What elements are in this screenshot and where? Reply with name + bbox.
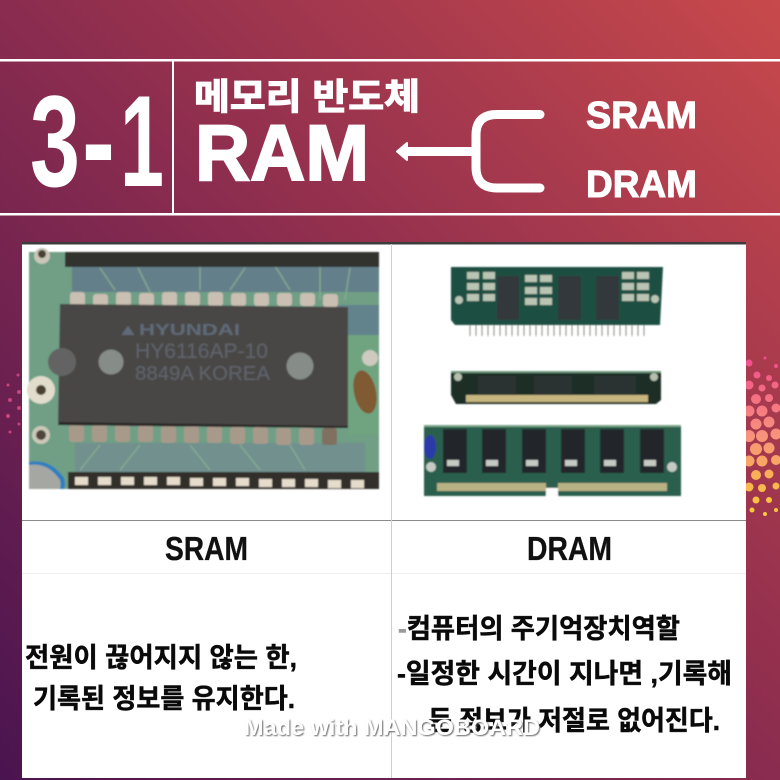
arrow and bracket bbox=[397, 114, 540, 188]
section number bbox=[30, 68, 164, 214]
halftone dots right bbox=[743, 356, 780, 516]
photo: SRAM chip bbox=[27, 248, 380, 489]
section number: 3 bbox=[30, 68, 80, 214]
table rules bbox=[22, 242, 746, 778]
header cell SRAM: SRAM bbox=[165, 530, 248, 567]
table panel bbox=[22, 242, 746, 778]
DRAM description bbox=[397, 614, 732, 736]
photo: SRAM chip: 8849A KOREA bbox=[135, 363, 271, 385]
module 3 bbox=[424, 425, 681, 496]
title RAM: RAM bbox=[195, 108, 369, 197]
DRAM description: -컴퓨터의 주기억장치역할 bbox=[398, 614, 680, 644]
blue via bbox=[29, 461, 65, 489]
DRAM description: -일정한 시간이 지나면 ,기록해 bbox=[397, 659, 732, 689]
photo: SRAM chip: HY6116AP-10 bbox=[135, 340, 268, 363]
upper socket bbox=[65, 252, 379, 267]
SRAM description bbox=[25, 643, 297, 714]
halftone dots left bbox=[6, 374, 21, 434]
SRAM description: 전원이 끊어지지 않는 한, bbox=[25, 643, 297, 673]
label SRAM: SRAM bbox=[586, 95, 697, 137]
photo: DRAM modules bbox=[424, 267, 681, 496]
comparison table bbox=[22, 242, 746, 778]
watermark: Made with MANGOBOARD bbox=[244, 715, 540, 740]
section number: 1 bbox=[120, 68, 164, 214]
board pads bbox=[27, 376, 55, 404]
DRAM description: 둔 정보가 저절로 없어진다. bbox=[428, 706, 720, 736]
chip marking: ▲HYUNDAI bbox=[117, 322, 240, 339]
traces bbox=[80, 266, 350, 470]
module 2 bbox=[451, 371, 661, 404]
header cell DRAM: DRAM bbox=[527, 530, 612, 567]
header rules bbox=[0, 59, 780, 216]
capacitor bbox=[350, 368, 380, 416]
module 1 bbox=[451, 267, 663, 336]
label DRAM: DRAM bbox=[586, 164, 697, 206]
chip pins bbox=[70, 292, 338, 307]
header band bbox=[0, 59, 780, 216]
SRAM description: 기록된 정보를 유지한다. bbox=[33, 684, 295, 714]
section number: - bbox=[82, 68, 115, 214]
subtitle: 메모리 반도체 bbox=[194, 76, 420, 117]
lower socket bbox=[68, 472, 379, 489]
chip body bbox=[58, 304, 348, 428]
